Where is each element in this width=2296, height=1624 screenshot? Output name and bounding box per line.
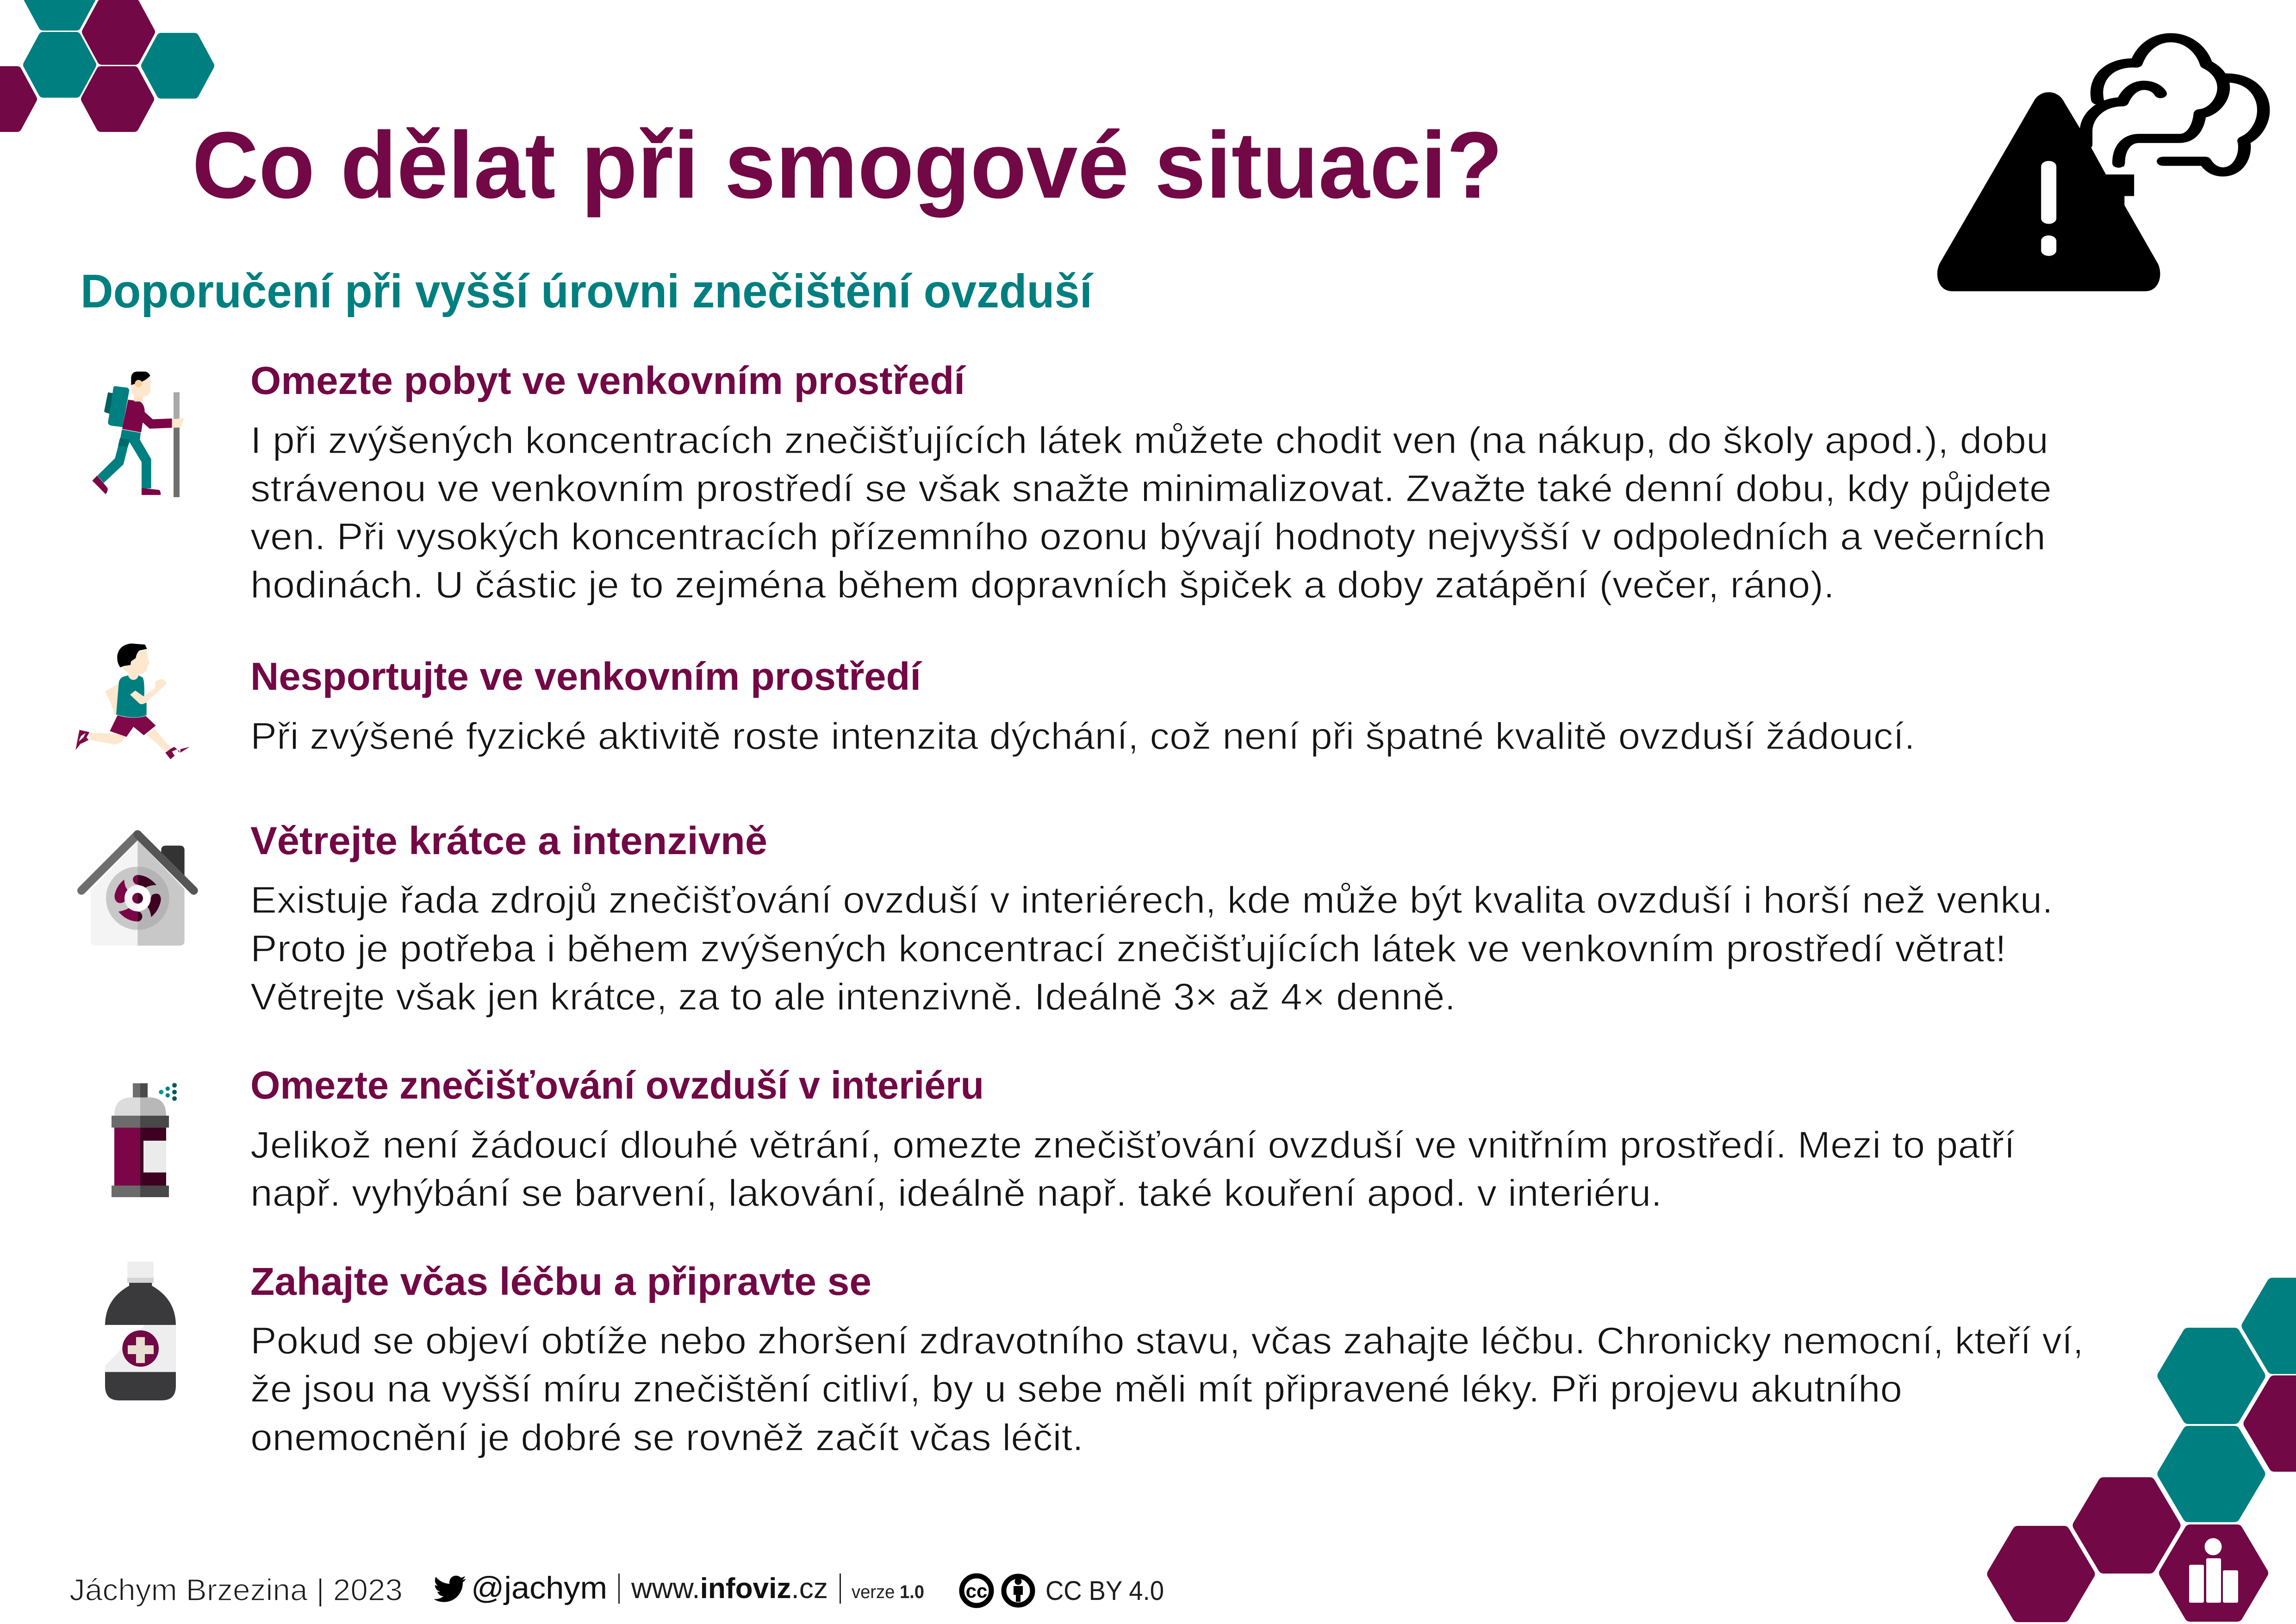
heading: Omezte znečišťování ovzduší v interiéru — [250, 1063, 984, 1107]
text block — [250, 1124, 2015, 1214]
text block: onemocnění je dobré se rovněž začít včas léčit. — [250, 1417, 1083, 1459]
text block: I při zvýšených koncentracích znečišťujících látek můžete chodit ven (na nákup, do školy apod.), dobu — [250, 419, 2048, 462]
version: verze 1.0 — [852, 1582, 924, 1602]
panel: tip 3 ventilation — [81, 819, 2053, 1018]
icon: infoviz logo — [2189, 1538, 2238, 1603]
heading: Nesportujte ve venkovním prostředí — [250, 655, 922, 698]
icon: creative commons: cc — [966, 1580, 987, 1602]
decoration: top-left hexagons — [0, 0, 210, 127]
text block: Při zvýšené fyzické aktivitě roste intenzita dýchání, což není při špatné kvalitě ovzduší žádoucí. — [250, 715, 1915, 757]
icon: warning triangle with smoke — [1937, 38, 2264, 291]
text block: že jsou na vyšší míru znečištění citliví, by u sebe měli mít připravené léky. Při projevu akutního — [250, 1368, 1902, 1410]
heading: Omezte pobyt ve venkovním prostředí — [250, 359, 966, 402]
title: Co dělat při smogové situaci? — [192, 112, 1503, 218]
text block — [250, 1320, 2084, 1459]
icon: spray can — [112, 1083, 177, 1197]
text block: Proto je potřeba i během zvýšených koncentrací znečišťujících látek ve venkovním prostředí větrat! — [250, 928, 2006, 970]
decoration: bottom-right hexagons — [1993, 1283, 2296, 1617]
icon: attribution — [1004, 1576, 1033, 1605]
author and year: Jáchym Brzezina | 2023 — [69, 1573, 403, 1607]
text block — [250, 419, 2052, 606]
license: CC BY 4.0 — [1045, 1576, 1164, 1606]
panel: tip 1 outdoor stay — [92, 359, 2052, 606]
icon: hiker — [92, 372, 184, 497]
text block: strávenou ve venkovním prostředí se však snažte minimalizovat. Zvažte také denní dobu, kdy půjdete — [250, 468, 2052, 510]
text block — [250, 879, 2053, 1018]
footer — [69, 1570, 1164, 1607]
text block: např. vyhýbání se barvení, lakování, ideálně např. také kouření apod. v interiéru. — [250, 1172, 1662, 1214]
subtitle: Doporučení při vyšší úrovni znečištění ovzduší — [81, 265, 1094, 318]
icon: house with fan — [81, 834, 194, 946]
icon: medicine bottle — [105, 1262, 176, 1400]
text block: ven. Při vysokých koncentracích přízemního ozonu bývají hodnoty nejvyšší v odpoledních a večerních — [250, 516, 2046, 558]
panel: tip 2 no outdoor sport — [75, 643, 1915, 759]
icon: creative commons — [962, 1576, 991, 1605]
text block: Větrejte však jen krátce, za to ale intenzivně. Ideálně 3× až 4× denně. — [250, 976, 1456, 1018]
heading: Zahajte včas léčbu a připravte se — [250, 1260, 871, 1303]
text block: Jelikož není žádoucí dlouhé větrání, omezte znečišťování ovzduší ve vnitřním prostředí. Mezi to patří — [250, 1124, 2015, 1166]
panel: tip 5 treatment — [105, 1260, 2084, 1459]
icon: runner — [75, 643, 190, 759]
text block: hodinách. U částic je to zejména během dopravních špiček a doby zatápění (večer, ráno). — [250, 564, 1835, 606]
panel: tip 4 indoor pollution — [112, 1063, 2015, 1214]
heading: Větrejte krátce a intenzivně — [250, 819, 767, 862]
website: www.infoviz.cz — [631, 1573, 828, 1605]
text block: Existuje řada zdrojů znečišťování ovzduší v interiérech, kde může být kvalita ovzduší i horší než venku. — [250, 879, 2053, 921]
icon: twitter bird — [434, 1576, 466, 1602]
text block: Pokud se objeví obtíže nebo zhoršení zdravotního stavu, včas zahajte léčbu. Chronicky nemocní, kteří ví, — [250, 1320, 2084, 1362]
twitter handle: @jachym — [471, 1570, 607, 1605]
